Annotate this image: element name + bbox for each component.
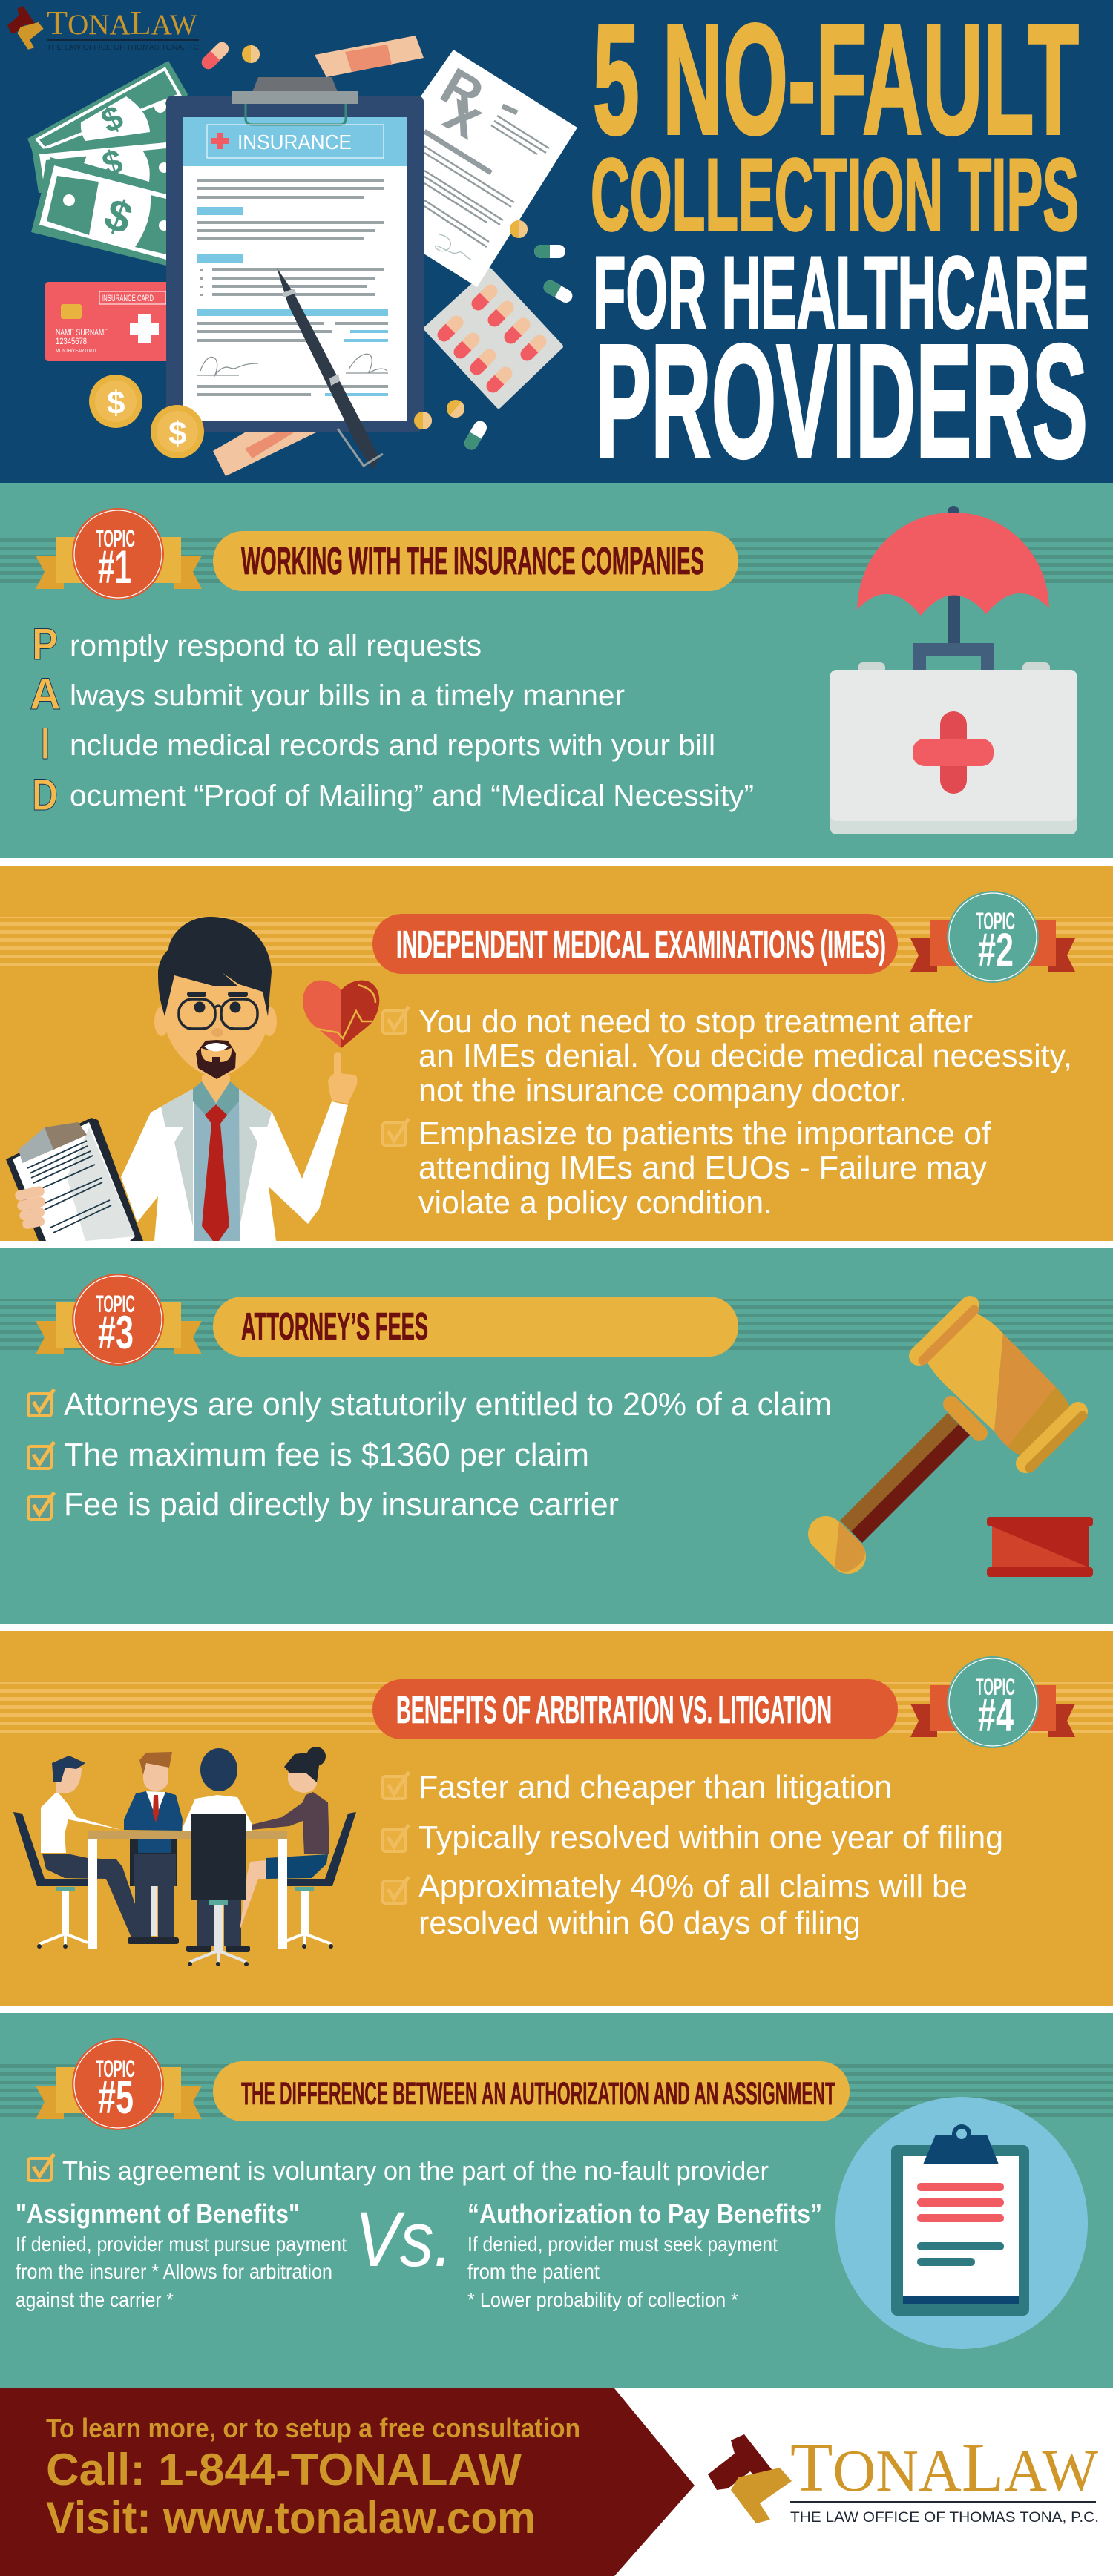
column: assignment of benefits: If denied, provider must pursue payment — [16, 2233, 347, 2256]
panel: topic 4 arbitration vs litigation — [0, 1631, 1113, 2006]
topic 5 badge: TOPIC — [96, 2055, 135, 2082]
icon: insurance card: 12345678 — [56, 336, 87, 346]
table — [88, 1831, 287, 1839]
PAID list: P — [32, 619, 58, 669]
heading pill: difference — [213, 2061, 850, 2121]
topic 1 badge: TOPIC — [96, 525, 135, 552]
topic 5 badge: #5 — [98, 2072, 134, 2124]
logo: footer TonaLaw: TONALAW — [790, 2429, 1099, 2506]
icon: coins: $ — [168, 415, 186, 452]
logo: footer TonaLaw: THE LAW OFFICE OF THOMAS TONA, P.C. — [790, 2510, 1099, 2526]
panel: header — [0, 0, 1113, 492]
topic 4 badge: #4 — [978, 1690, 1014, 1742]
text: stop treatment: not the insurance company doctor. — [418, 1073, 907, 1109]
column: authorization to pay benefits: from the patient — [467, 2260, 600, 2283]
column: assignment of benefits — [16, 2198, 347, 2311]
icon: money bills: $ — [99, 188, 139, 244]
icon: blister pack — [426, 270, 561, 406]
insurance header box: INSURANCE — [237, 131, 352, 154]
PAID list: D — [32, 770, 58, 820]
logo: header TonaLaw: TONALAW — [47, 4, 197, 42]
person 4 — [240, 1860, 266, 1931]
checklist: attorney fees: Fee is paid directly by insurance carrier — [64, 1486, 619, 1523]
topic 2 badge: TOPIC — [976, 908, 1015, 935]
icon: bottom bandage — [213, 432, 316, 476]
text: voluntary agreement: This agreement is voluntary on the part of the no-fault provider — [62, 2155, 769, 2186]
checklist: attorney fees — [28, 1386, 832, 1523]
icon: insurance card — [45, 282, 171, 361]
column: authorization to pay benefits: If denied, provider must seek payment — [467, 2233, 778, 2256]
topic 1 badge: #1 — [98, 541, 131, 593]
heading pill: attorney's fees — [213, 1297, 738, 1357]
text: attending IMEs: Emphasize to patients the importance of — [418, 1116, 991, 1152]
text: attending IMEs: attending IMEs and EUOs - Failure may — [418, 1150, 987, 1186]
checklist: arbitration benefits: Faster and cheaper than litigation — [418, 1769, 892, 1805]
topic 3 badge: TOPIC — [96, 1291, 135, 1317]
checklist: attorney fees: Attorneys are only statutorily entitled to 20% of a claim — [64, 1386, 832, 1423]
column: assignment of benefits: from the insurer * Allows for arbitration — [16, 2260, 332, 2283]
column: authorization to pay benefits: * Lower probability of collection * — [467, 2288, 738, 2311]
contact text: Visit: www.tonalaw.com — [46, 2493, 536, 2543]
PAID list: nclude medical records and reports with your bill — [70, 729, 715, 762]
PAID list — [30, 619, 754, 820]
contact text — [46, 2413, 580, 2543]
topic 4 badge — [910, 1656, 1075, 1748]
PAID list: I — [41, 719, 50, 768]
heading pill: arbitration — [372, 1679, 898, 1739]
illustration: meeting around table — [13, 1747, 356, 1966]
icon: top bandage — [315, 36, 424, 77]
person 3 — [200, 1748, 237, 1791]
checkbox: attendance — [383, 1119, 409, 1145]
icon: capsules — [199, 39, 575, 452]
checkbox: voluntary — [28, 2154, 54, 2181]
title — [591, 0, 1089, 492]
icon: prescription paper: R — [432, 56, 493, 125]
topic 3 badge: #3 — [98, 1307, 134, 1359]
PAID list: ocument “Proof of Mailing” and “Medical Necessity” — [70, 780, 754, 812]
insurance header box — [207, 125, 384, 158]
panel: topic 5 authorization vs assignment — [0, 2013, 1113, 2388]
checklist: arbitration benefits: Typically resolved within one year of filing — [418, 1819, 1003, 1856]
icon: clipboard — [166, 77, 424, 432]
topic 3 badge — [36, 1274, 202, 1366]
column: authorization to pay benefits: “Authorization to Pay Benefits” — [467, 2198, 822, 2229]
text: stop treatment: an IMEs denial. You decide medical necessity, — [418, 1038, 1072, 1074]
panel: footer — [0, 2388, 1113, 2576]
icon: prescription paper — [416, 50, 577, 287]
person 1 — [42, 1854, 148, 1943]
topic 5 badge — [36, 2038, 202, 2130]
panel: topic 1 insurance companies — [0, 483, 1113, 858]
heading pill: attorney's fees: ATTORNEY’S FEES — [241, 1305, 428, 1348]
icon: umbrella over medical kit — [830, 506, 1077, 834]
illustration: doctor with heart and clipboard — [6, 917, 379, 1241]
column: assignment of benefits: against the carrier * — [16, 2288, 174, 2311]
checkbox: treatment — [383, 1007, 409, 1033]
versus label: Vs. — [355, 2196, 453, 2283]
PAID list: lways submit your bills in a timely manner — [70, 679, 625, 712]
icon: insurance card: INSURANCE CARD — [102, 293, 154, 303]
contact text: To learn more, or to setup a free consultation — [46, 2413, 580, 2443]
icon: gavel — [826, 1305, 1093, 1577]
checklist: arbitration benefits — [383, 1769, 1003, 1941]
icon: insurance card: MONTH/YEAR 00/00 — [56, 349, 96, 354]
logo: footer TonaLaw — [708, 2429, 1099, 2526]
text: stop treatment: You do not need to stop treatment after — [418, 1004, 973, 1040]
checklist: arbitration benefits: Approximately 40% of all claims will be — [418, 1868, 968, 1905]
heading pill: working with the insurance companies: WORKING WITH THE INSURANCE COMPANIES — [241, 540, 704, 583]
person 2 — [130, 1839, 177, 1886]
logo: header TonaLaw: THE LAW OFFICE OF THOMAS TONA, P.C. — [47, 44, 201, 52]
icon: coins: $ — [107, 385, 125, 421]
text: attending IMEs — [418, 1116, 991, 1221]
topic 2 badge: #2 — [978, 924, 1014, 976]
PAID list: romptly respond to all requests — [70, 630, 482, 662]
contact text: Call: 1-844-TONALAW — [46, 2445, 522, 2494]
checklist: arbitration benefits: resolved within 60 days of filing — [418, 1905, 861, 1941]
icon: coins — [89, 45, 528, 458]
logo: header TonaLaw — [7, 4, 201, 52]
text: stop treatment — [418, 1004, 1072, 1109]
icon: pencil — [277, 268, 383, 470]
icon: money bills: $ — [98, 142, 126, 184]
icon: money bills: $ — [95, 97, 128, 140]
icon: money bills — [27, 61, 188, 266]
column: authorization to pay benefits — [467, 2198, 822, 2311]
panel: topic 3 attorney's fees — [0, 1248, 1113, 1624]
column: assignment of benefits: "Assignment of Benefits" — [16, 2198, 300, 2229]
PAID list: A — [30, 669, 61, 719]
topic 2 badge — [910, 891, 1075, 983]
heading pill: working with the insurance companies — [213, 531, 738, 591]
icon: clipboard in circle — [835, 2097, 1088, 2349]
panel: topic 2 independent medical examinations — [0, 866, 1113, 1241]
heading pill: IMEs — [372, 914, 898, 974]
icon: insurance card: NAME SURNAME — [56, 327, 108, 337]
text: attending IMEs: violate a policy condition. — [418, 1185, 772, 1221]
topic 4 badge: TOPIC — [976, 1673, 1015, 1700]
icon: prescription paper: x — [434, 79, 495, 151]
topic 1 badge — [36, 508, 202, 600]
checklist: attorney fees: The maximum fee is $1360 per claim — [64, 1437, 589, 1473]
